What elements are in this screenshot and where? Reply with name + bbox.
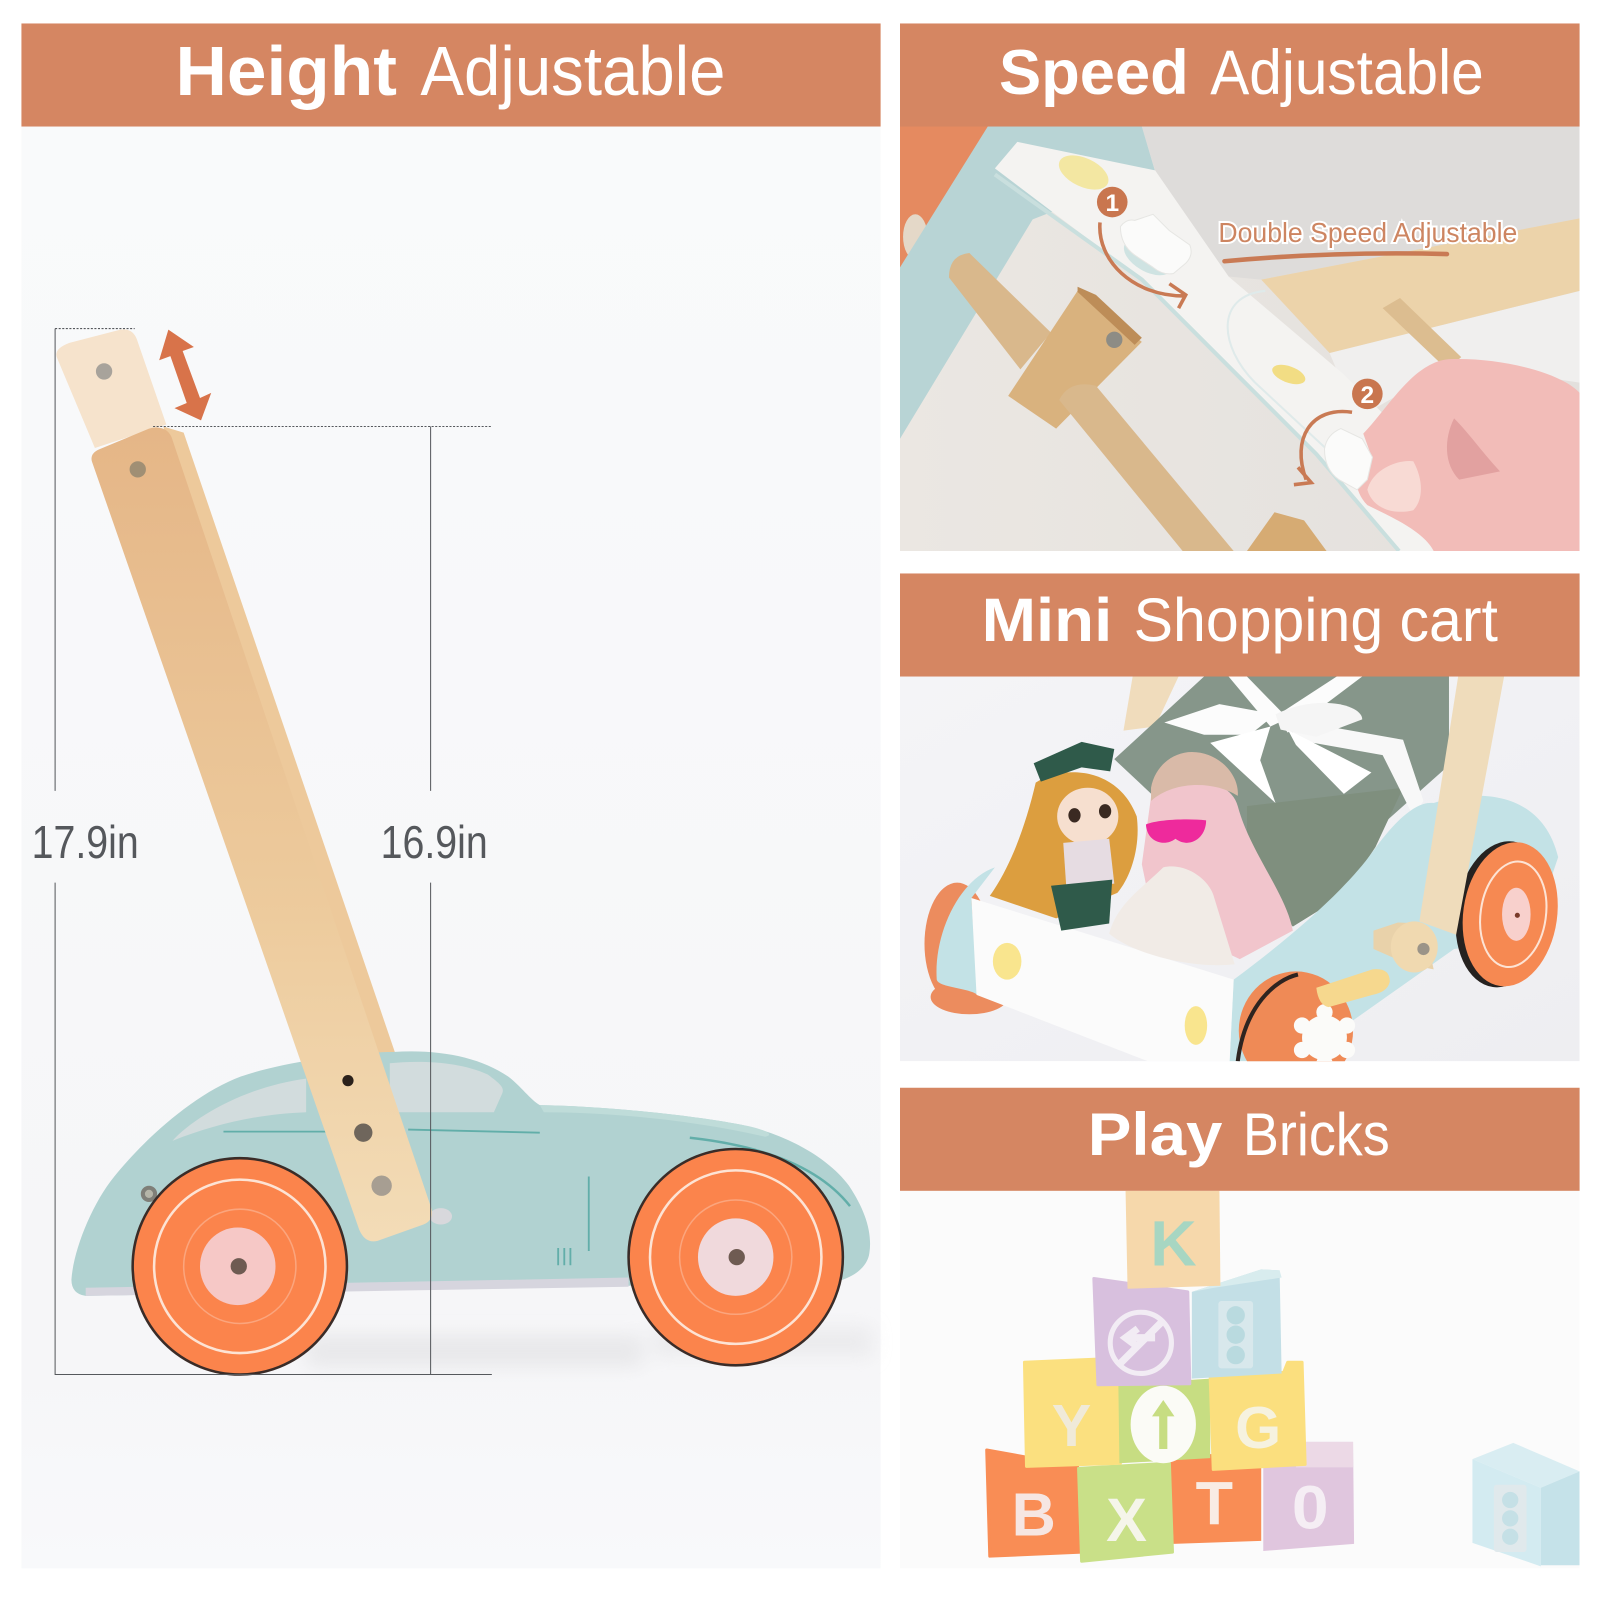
heading: height adjustable (21, 23, 881, 127)
axle peg (1373, 921, 1438, 972)
brick: green X (1079, 1463, 1172, 1561)
panel: mini shopping cart (900, 573, 1580, 1090)
car trim lines (223, 1130, 850, 1265)
left wheel (924, 883, 1008, 1014)
right wooden crossbar (1261, 218, 1580, 353)
arrow 2 (1294, 412, 1352, 485)
wheel: front (629, 1149, 843, 1365)
heading: speed adjustable: Speed (999, 38, 1189, 108)
heading: play bricks: Bricks (1243, 1101, 1390, 1168)
dimension lines (55, 329, 492, 1374)
brick: yellow Y (1024, 1358, 1120, 1466)
brick: K: K (1150, 1207, 1197, 1279)
brick: K (1126, 1189, 1220, 1289)
dimension: 17.9in: 17.9in (32, 816, 139, 868)
brick: green arrow (1118, 1379, 1210, 1463)
step 1 badge: 1 (1105, 190, 1119, 217)
car side bolts (141, 1186, 157, 1202)
brick: traffic light (1192, 1269, 1282, 1379)
callout: double speed adjustable: Double Speed Adjustable (1218, 217, 1517, 248)
brick: purple 0 (1263, 1442, 1354, 1551)
handle: main wooden rail (91, 428, 432, 1241)
panel: height adjustable (21, 23, 881, 1568)
ribbon (1228, 676, 1282, 726)
brick: orange B (987, 1450, 1082, 1556)
dimension: 16.9in: 16.9in (381, 816, 488, 868)
handle: back rail (163, 427, 398, 1061)
heading: play bricks (900, 1088, 1580, 1191)
arrow: height adjustment (159, 330, 211, 420)
car rear top edge (540, 1105, 769, 1137)
lower wooden block (1247, 512, 1327, 551)
car underside (86, 1278, 629, 1296)
front wheel with gear (1236, 969, 1390, 1062)
brick: orange T: T (1196, 1469, 1233, 1537)
right wheel (1456, 841, 1558, 988)
teal side rail (900, 127, 1155, 439)
main wooden dowel upper (949, 253, 1051, 369)
car body (71, 1051, 870, 1296)
callout: double speed adjustable (1218, 217, 1517, 261)
heading: height adjustable: Adjustable (420, 32, 726, 110)
heading: mini shopping cart: Mini (982, 586, 1112, 654)
white panel (995, 142, 1434, 551)
heading: play bricks: Play (1088, 1101, 1223, 1168)
front left fender (936, 867, 995, 995)
handle: extended upper section (56, 329, 166, 448)
step 1 badge (1097, 187, 1128, 217)
left upright (1123, 677, 1179, 731)
step 2 badge (1352, 379, 1383, 409)
car side teal (1230, 796, 1558, 1061)
orange wheel corner (900, 127, 992, 270)
white front box (971, 898, 1234, 1061)
wheel: rear (133, 1158, 347, 1374)
brick: yellow G (1210, 1362, 1305, 1469)
brick: purple 0: 0 (1292, 1474, 1329, 1542)
panel decorations (1058, 155, 1108, 190)
brick: loose blue (1472, 1443, 1580, 1566)
knob 1 (1120, 214, 1192, 276)
gear (1294, 1004, 1355, 1062)
brick: orange T (1169, 1454, 1261, 1544)
upper handle bolt (96, 363, 112, 380)
heading: speed adjustable (900, 23, 1580, 127)
panel: play bricks (900, 1088, 1580, 1568)
heading: height adjustable: Height (176, 32, 397, 110)
hand (1356, 359, 1580, 551)
brick: purple sign (1094, 1279, 1190, 1385)
brick: yellow Y: Y (1052, 1392, 1091, 1459)
panel: speed adjustable (900, 23, 1580, 551)
thin dowel (1382, 298, 1462, 362)
floor shadow (306, 1327, 872, 1367)
heading: mini shopping cart: Shopping cart (1134, 586, 1498, 654)
doll: blonde (990, 742, 1138, 931)
wooden block (1008, 287, 1142, 429)
doll: pink hair (1109, 752, 1293, 965)
brick: green X: X (1106, 1486, 1147, 1554)
knob 2 (1324, 429, 1372, 490)
wooden upright right (1419, 677, 1504, 935)
brick: yellow G: G (1235, 1394, 1281, 1461)
heading: speed adjustable: Adjustable (1210, 38, 1484, 108)
yellow lever (1316, 969, 1390, 1007)
step 2 badge: 2 (1361, 382, 1374, 409)
heading: mini shopping cart (900, 573, 1580, 677)
brick: orange B: B (1012, 1481, 1056, 1549)
main wooden dowel lower (1059, 384, 1234, 551)
car windows (172, 1079, 306, 1141)
arrow 1 (1100, 222, 1186, 308)
gift box (1114, 677, 1449, 927)
